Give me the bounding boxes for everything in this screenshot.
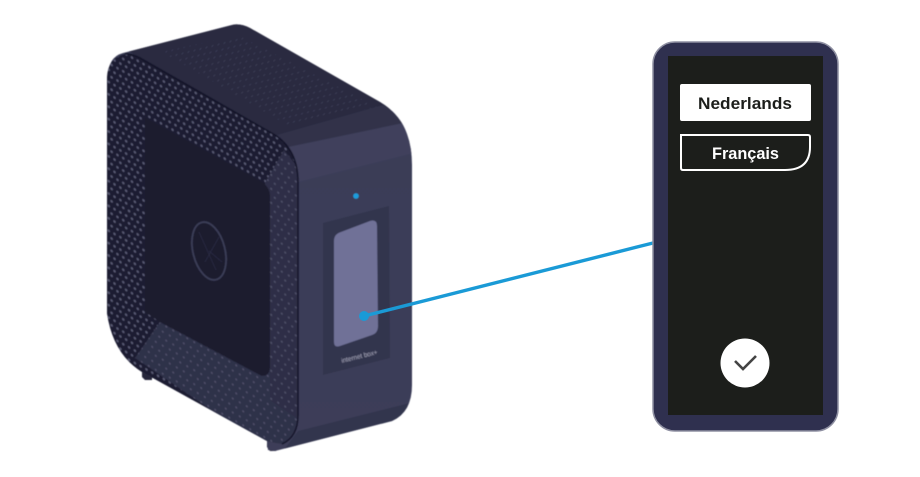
infographic canvas xyxy=(106,24,839,452)
logo emblem xyxy=(186,219,232,283)
front grille face xyxy=(100,40,300,450)
button: Nederlands xyxy=(680,84,811,121)
device screen xyxy=(334,221,378,346)
screen frame xyxy=(653,42,838,431)
button: Nederlands: Nederlands xyxy=(698,94,792,113)
bottom lighter grille strip xyxy=(135,322,287,444)
device label: internet box+ xyxy=(341,349,378,365)
router body silhouette xyxy=(107,24,412,451)
button: Français: Français xyxy=(712,144,779,163)
router feet xyxy=(142,372,276,451)
right lighter grille strip xyxy=(265,150,298,418)
screen display xyxy=(668,56,823,415)
phone-style screen enlargement xyxy=(653,42,838,431)
router device xyxy=(100,10,420,455)
connector line with endpoint xyxy=(359,243,653,321)
confirm check button xyxy=(720,338,770,388)
screen bezel xyxy=(323,206,390,375)
button: Français xyxy=(681,135,810,170)
top face with dots xyxy=(129,24,412,449)
status LED xyxy=(353,193,359,199)
inner dark panel xyxy=(145,118,270,376)
front face edge outline xyxy=(125,54,298,444)
